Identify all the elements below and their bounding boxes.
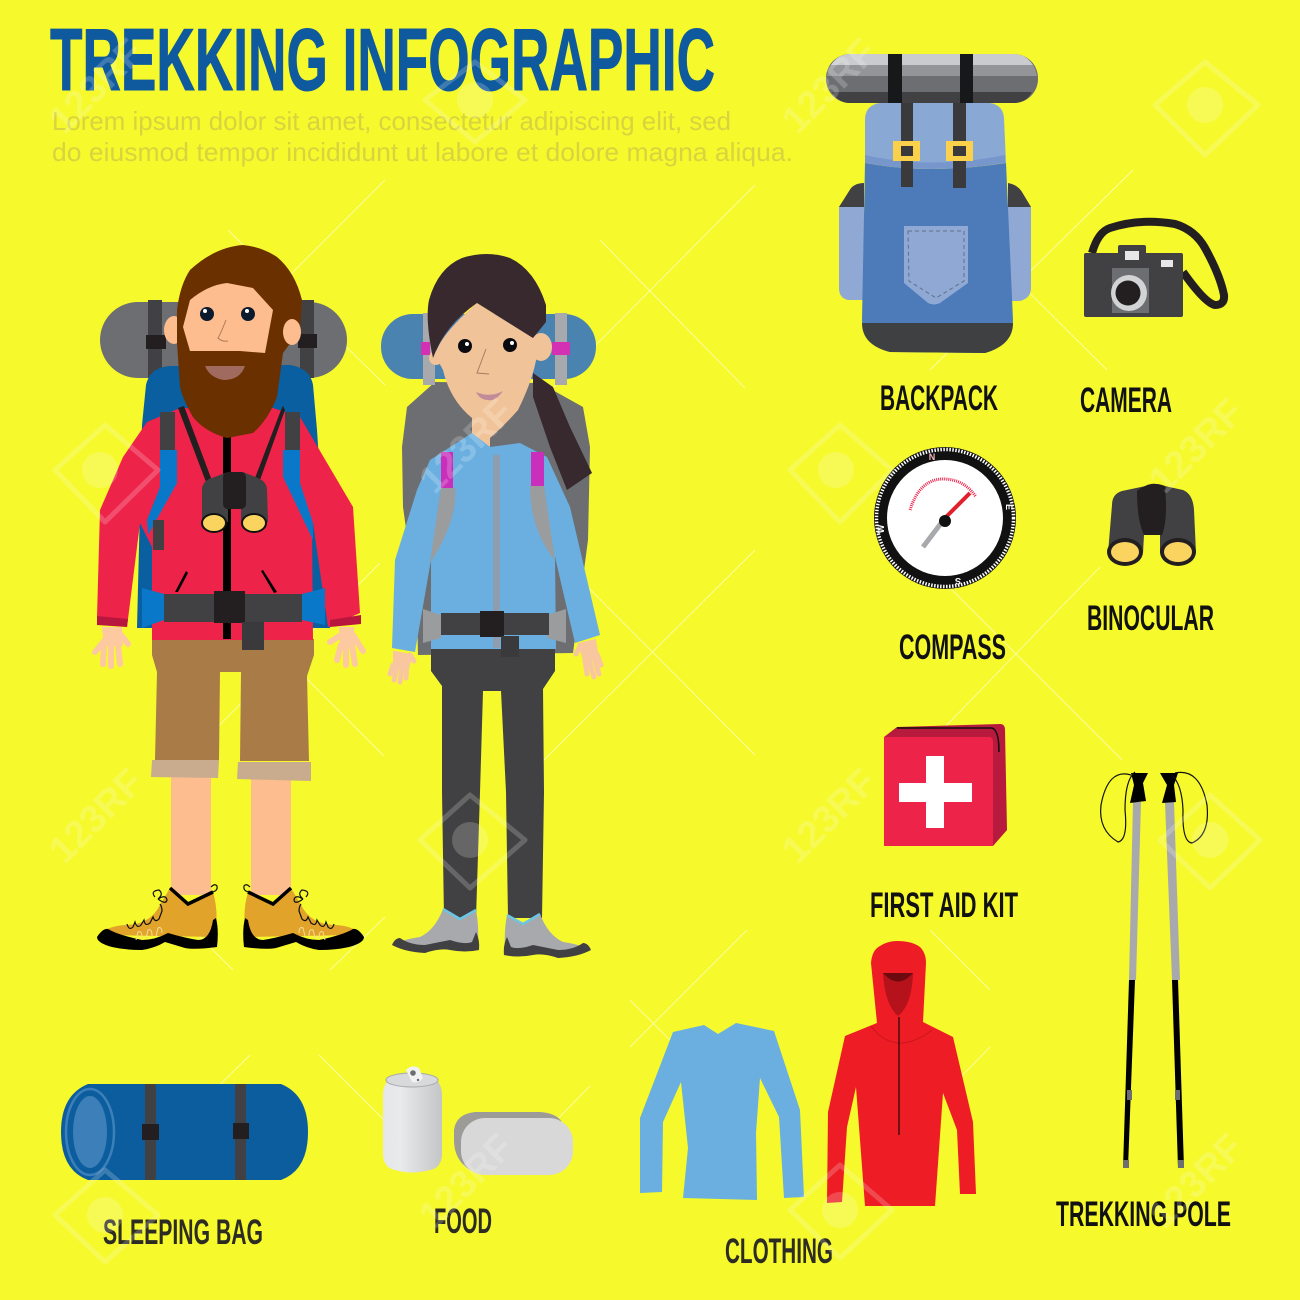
icon: base layer shirt xyxy=(640,1023,804,1200)
belt xyxy=(164,594,302,622)
jacket xyxy=(392,433,600,652)
icon: red hooded jacket xyxy=(827,941,976,1206)
left boot xyxy=(97,885,218,950)
left hand xyxy=(95,628,128,666)
right hand xyxy=(576,640,601,677)
left hand xyxy=(390,652,414,682)
icon: compass xyxy=(874,447,1016,589)
title: TREKKING INFOGRAPHIC xyxy=(50,10,715,109)
icon: binocular xyxy=(1107,484,1196,566)
label: clothing: CLOTHING xyxy=(725,1232,833,1271)
icon: trekking poles xyxy=(1101,772,1207,1168)
label: sleeping bag: SLEEPING BAG xyxy=(103,1213,263,1252)
watermark stamps: 123RF xyxy=(41,31,152,142)
right shoe xyxy=(504,914,591,958)
icon: food can and tin xyxy=(383,1066,573,1175)
watermark stamps: 123RF xyxy=(411,1126,522,1237)
bedroll xyxy=(826,54,1038,103)
icon: compass: W xyxy=(876,524,886,533)
watermark stamps: 123RF xyxy=(774,31,885,142)
icon: camera xyxy=(1084,222,1224,317)
subtitle text block: Lorem ipsum dolor sit amet, consectetur adipiscing elit, sed xyxy=(52,106,731,136)
head xyxy=(164,316,184,344)
icon: compass: N xyxy=(929,452,935,462)
label: binocular: BINOCULAR xyxy=(1087,599,1214,638)
pocket xyxy=(904,226,968,304)
jacket xyxy=(97,408,360,640)
icon: backpack xyxy=(826,54,1038,353)
watermark stamps: 123RF xyxy=(41,761,152,872)
label: compass: COMPASS xyxy=(899,628,1006,667)
pack straps xyxy=(160,412,175,450)
label: food: FOOD xyxy=(434,1202,492,1241)
chest binoculars xyxy=(202,472,268,522)
trousers xyxy=(431,648,555,918)
icon: sleeping bag xyxy=(61,1084,308,1180)
label: first aid kit: FIRST AID KIT xyxy=(870,886,1018,925)
hair xyxy=(428,254,546,358)
label: camera: CAMERA xyxy=(1080,381,1172,420)
belt xyxy=(423,609,566,643)
watermark stamps: 123RF xyxy=(1141,391,1252,502)
watermark stamps: 123RF xyxy=(1141,1126,1252,1237)
left shoe xyxy=(392,909,479,953)
icon: compass: S xyxy=(955,576,961,586)
right hand xyxy=(330,628,363,665)
shoulder straps xyxy=(441,452,453,488)
icon: compass: E xyxy=(1004,504,1014,510)
watermark stamps: 123RF xyxy=(411,391,522,502)
man trekker xyxy=(95,245,364,950)
icon: first aid kit xyxy=(884,724,1007,846)
subtitle text block: do eiusmod tempor incididunt ut labore et dolore magna aliqua. xyxy=(52,137,793,167)
right boot xyxy=(243,885,364,950)
face and neck xyxy=(435,303,537,447)
subtitle text block xyxy=(52,106,793,167)
watermark stamps: 123RF xyxy=(774,761,885,872)
woman trekker xyxy=(381,254,601,958)
label: backpack: BACKPACK xyxy=(880,379,998,418)
